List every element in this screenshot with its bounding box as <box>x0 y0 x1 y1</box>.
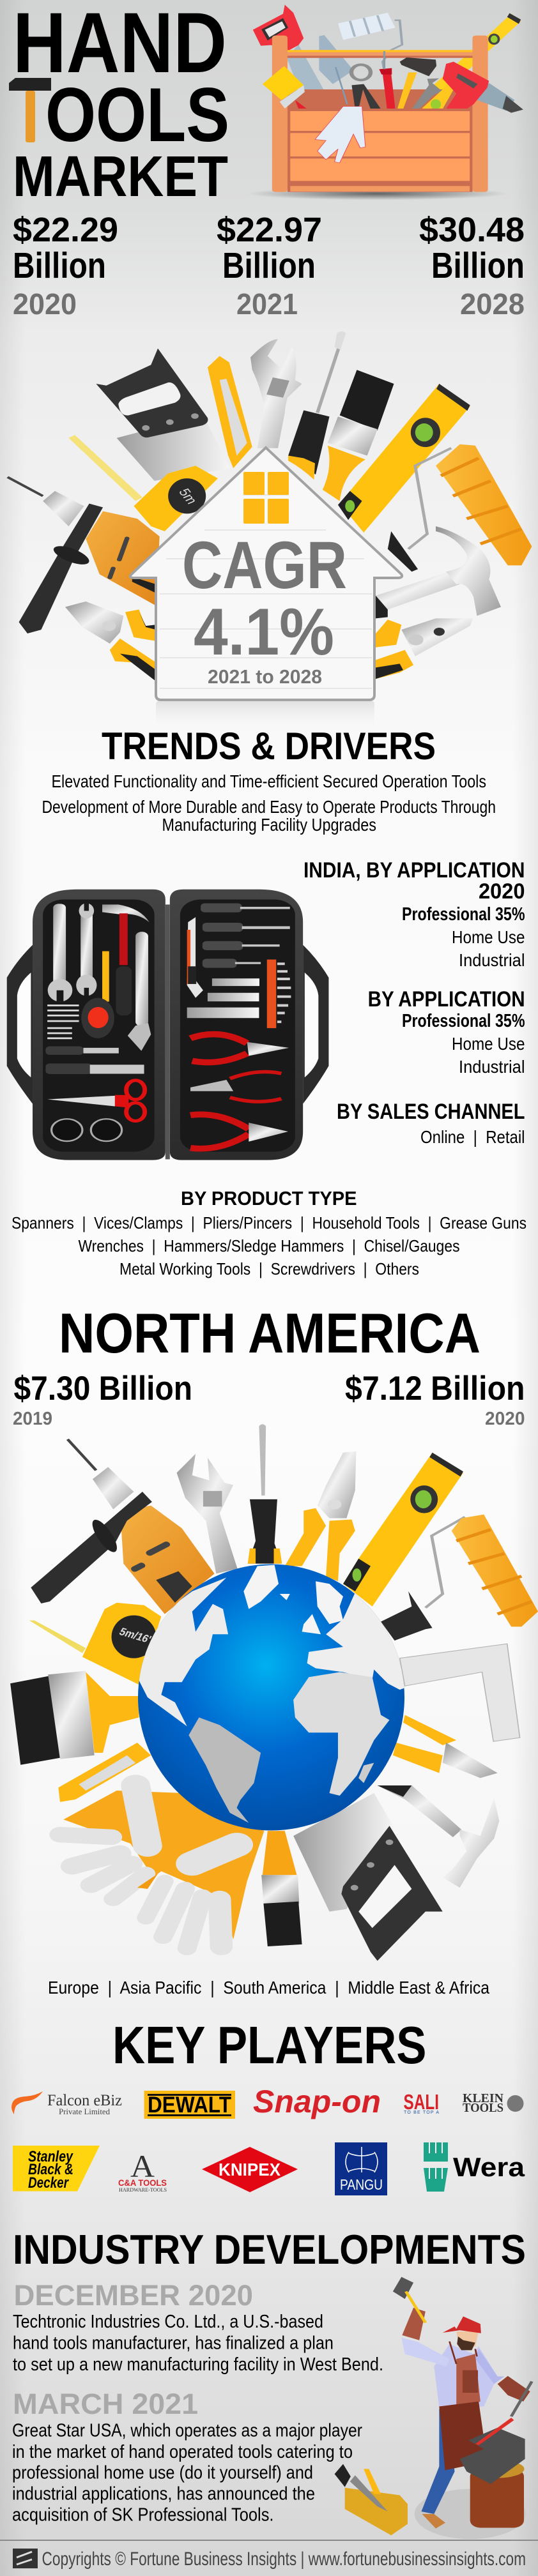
segment: by product type <box>12 1187 526 1278</box>
continent: Greenland <box>243 1565 279 1609</box>
development: December 2020: hand tools manufacturer, has finalized a plan <box>13 2333 334 2354</box>
stat: 2020 market size <box>13 211 118 321</box>
logo: Wera: Wera <box>453 2152 525 2182</box>
logo: Falcon eBiz: Falcon eBiz <box>47 2092 122 2109</box>
stat: North America 2019: 2019 <box>13 1409 52 1429</box>
icon: house window <box>243 472 289 524</box>
logo: Klein Tools: TOOLS <box>463 2101 503 2115</box>
house with CAGR: 4.1% <box>194 595 334 669</box>
segment: by application: Industrial <box>459 1057 525 1077</box>
logo: Snap-on: Snap-on <box>253 2084 381 2119</box>
footer <box>0 2540 538 2570</box>
stat: 2020 market size: 2020 <box>13 287 77 321</box>
development: March 2021: industrial applications, has announced the <box>12 2484 315 2504</box>
stat: North America 2020: 2020 <box>485 1409 525 1429</box>
logo: Klein Tools: KLEIN <box>463 2091 504 2105</box>
illustration: globe <box>137 1565 406 1830</box>
stat: 2021 market size: Billion <box>222 245 316 286</box>
title: OOLS <box>45 72 229 158</box>
house with CAGR: 2021 to 2028 <box>208 665 322 688</box>
continent: Africa <box>293 1672 389 1796</box>
stat: 2020 market size: Billion <box>13 245 106 286</box>
logo: C&A Tools <box>118 2148 167 2193</box>
stat: 2021 market size: $22.97 <box>217 211 322 249</box>
illustration: open tool case <box>7 890 328 1160</box>
text block: trends list: Manufacturing Facility Upgrades <box>162 815 376 835</box>
heading: key players: KEY PLAYERS <box>112 2015 427 2075</box>
stat: North America 2020 <box>345 1370 525 1429</box>
development: December 2020: to set up a new manufacturing facility in West Bend. <box>13 2354 383 2375</box>
development: March 2021: professional home use (do it yourself) and <box>12 2462 313 2483</box>
logo: Pangu: PANGU <box>340 2176 383 2193</box>
logo: Wera <box>424 2142 525 2192</box>
logo: Stanley Black and Decker <box>13 2146 100 2192</box>
logo: DeWalt: DEWALT <box>148 2093 231 2118</box>
continent: Iceland <box>280 1594 290 1600</box>
tools: right side of case <box>187 904 291 1149</box>
continent: UK <box>302 1614 321 1634</box>
icon: gloves <box>60 1785 264 1948</box>
illustration: tools around house: 5m <box>175 487 200 506</box>
logo: SALI: SALI <box>404 2090 439 2114</box>
illustration: tools around globe, upper: 5m/16' <box>117 1626 153 1646</box>
stat: North America 2019 <box>13 1370 192 1429</box>
illustration: gloves, brush, saw and hammer <box>60 1785 499 1961</box>
logo: Falcon eBiz: Private Limited <box>59 2107 110 2116</box>
logo: C&A Tools: A <box>130 2148 155 2184</box>
icon: hammer as letter T <box>9 78 51 142</box>
stat: 2020 market size: $22.29 <box>13 211 118 249</box>
tools: left side of case <box>45 904 151 1141</box>
development: December 2020: Techtronic Industries Co. Ltd., a U.S.-based <box>13 2312 323 2332</box>
illustration: blacksmith with anvil and toolbox <box>335 2277 532 2539</box>
development: March 2021: MARCH 2021 <box>13 2388 198 2420</box>
text block: trends list <box>42 771 496 835</box>
continent: Madagascar <box>358 1763 374 1783</box>
continent: South America <box>188 1718 261 1823</box>
illustration: toolbox <box>247 4 523 200</box>
development: December 2020 <box>13 2279 383 2375</box>
illustration: tools around globe, upper <box>10 1424 538 1802</box>
stat: 2021 market size: 2021 <box>236 287 298 321</box>
segment: by product type: Metal Working Tools | Screwdrivers | Others <box>119 1259 419 1278</box>
logo: Pangu <box>335 2142 387 2195</box>
stat: North America 2020: $7.12 Billion <box>345 1370 525 1407</box>
illustration: tools around house <box>8 331 532 681</box>
icon: Fortune Business Insights logo <box>13 2549 38 2568</box>
segment: by product type: BY PRODUCT TYPE <box>181 1187 357 1209</box>
heading: trends and drivers: TRENDS & DRIVERS <box>102 725 436 768</box>
segment: India by application <box>304 858 525 970</box>
logo: Stanley Black and Decker: Black & <box>28 2161 73 2178</box>
house with CAGR <box>130 448 402 732</box>
heading: North America: NORTH AMERICA <box>59 1301 480 1365</box>
segment: India by application: 2020 <box>479 879 525 904</box>
logo: Stanley Black and Decker: Stanley <box>28 2148 73 2165</box>
logo: Falcon eBiz <box>12 2091 122 2116</box>
title: MARKET <box>13 145 228 209</box>
stat: 2021 market size <box>217 211 322 321</box>
development: March 2021: in the market of hand operated tools catering to <box>12 2442 353 2462</box>
logo: Stanley Black and Decker: Decker <box>28 2174 69 2192</box>
development: March 2021: Great Star USA, which operates as a major player <box>12 2420 362 2441</box>
continent: Scandinavia <box>316 1581 343 1624</box>
stat: 2028 market size <box>419 211 525 321</box>
segment: India by application: Home Use <box>452 927 525 947</box>
text: other regions: Europe | Asia Pacific | South America | Middle East & Africa <box>48 1978 489 1997</box>
development: December 2020: DECEMBER 2020 <box>14 2279 253 2312</box>
logo: Klein Tools <box>463 2091 524 2115</box>
logo: SALI: TO BE TOP A <box>404 2110 439 2115</box>
logo: C&A Tools: C&A TOOLS <box>118 2178 167 2188</box>
stat: North America 2019: $7.30 Billion <box>14 1370 192 1407</box>
segment: by application: Home Use <box>452 1034 525 1054</box>
development: March 2021 <box>12 2388 362 2525</box>
continent: Eurasia <box>307 1593 406 1690</box>
title <box>9 0 229 209</box>
development: March 2021: acquisition of SK Professional Tools. <box>12 2504 273 2525</box>
segment: India by application: Industrial <box>459 950 525 970</box>
logo: Knipex <box>202 2147 298 2192</box>
house with CAGR: CAGR <box>182 528 347 603</box>
segment: by sales channel <box>337 1100 525 1147</box>
continent: North America <box>137 1577 228 1726</box>
logo: C&A Tools: HARDWARE-TOOLS <box>119 2187 167 2193</box>
segment: by product type: Wrenches | Hammers/Sledge Hammers | Chisel/Gauges <box>78 1236 460 1255</box>
stat: 2028 market size: 2028 <box>460 287 525 321</box>
segment: by application <box>368 987 525 1077</box>
logo: Knipex: KNIPEX <box>219 2160 281 2179</box>
stat: 2028 market size: $30.48 <box>419 211 525 249</box>
